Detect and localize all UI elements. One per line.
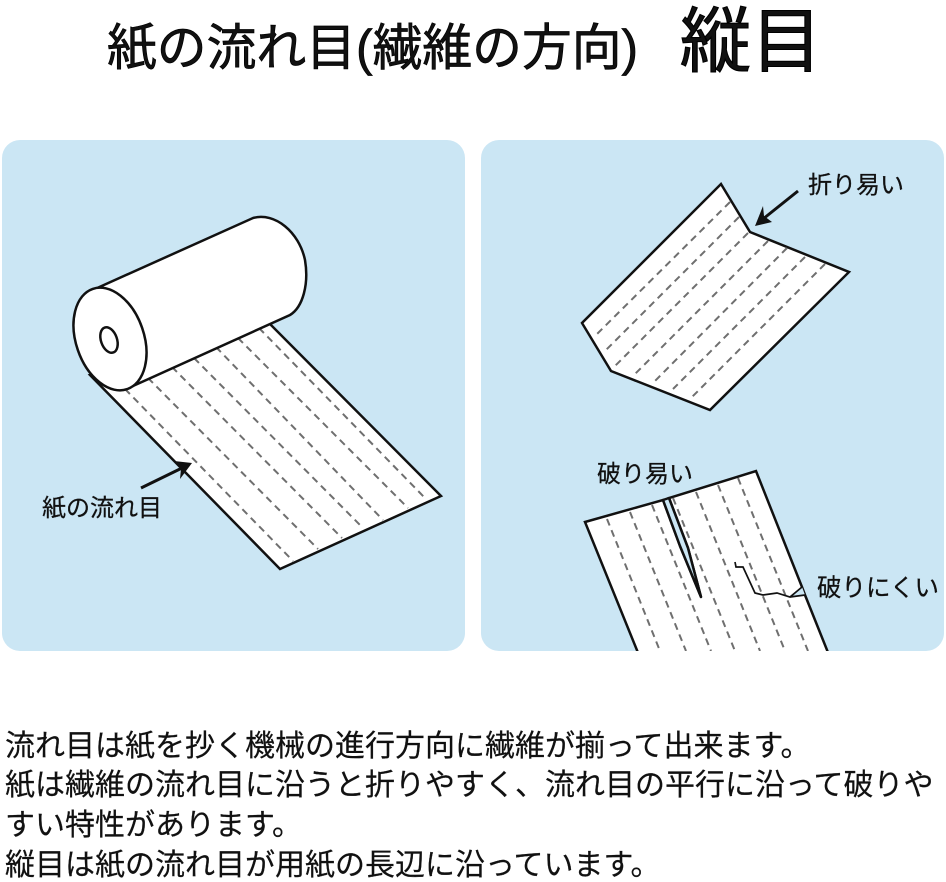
body text: すい特性があります。 — [5, 809, 302, 842]
folded sheet — [582, 184, 849, 410]
label: easy to fold: 折り易い — [808, 172, 904, 199]
label: grain direction: 紙の流れ目 — [42, 495, 162, 522]
title: 縦目 — [680, 3, 822, 82]
arrow to grain — [141, 461, 192, 488]
arrow to fold — [755, 191, 798, 226]
title: 紙の流れ目(繊維の方向) — [107, 20, 638, 76]
label: easy to tear: 破り易い — [597, 461, 693, 488]
body text: 縦目は紙の流れ目が用紙の長辺に沿っています。 — [5, 849, 660, 882]
panel: paper roll — [2, 140, 465, 651]
paper sheet unrolled — [90, 322, 441, 569]
body text: 流れ目は紙を抄く機械の進行方向に繊維が揃って出来ます。 — [5, 730, 810, 763]
panel: fold and tear — [481, 140, 944, 670]
body text: 紙は繊維の流れ目に沿うと折りやすく、流れ目の平行に沿って破りや — [5, 769, 934, 802]
body text — [5, 730, 934, 882]
torn sheet — [583, 470, 829, 651]
label: hard to tear: 破りにくい — [817, 574, 939, 602]
paper roll — [61, 217, 306, 400]
title — [107, 3, 822, 82]
